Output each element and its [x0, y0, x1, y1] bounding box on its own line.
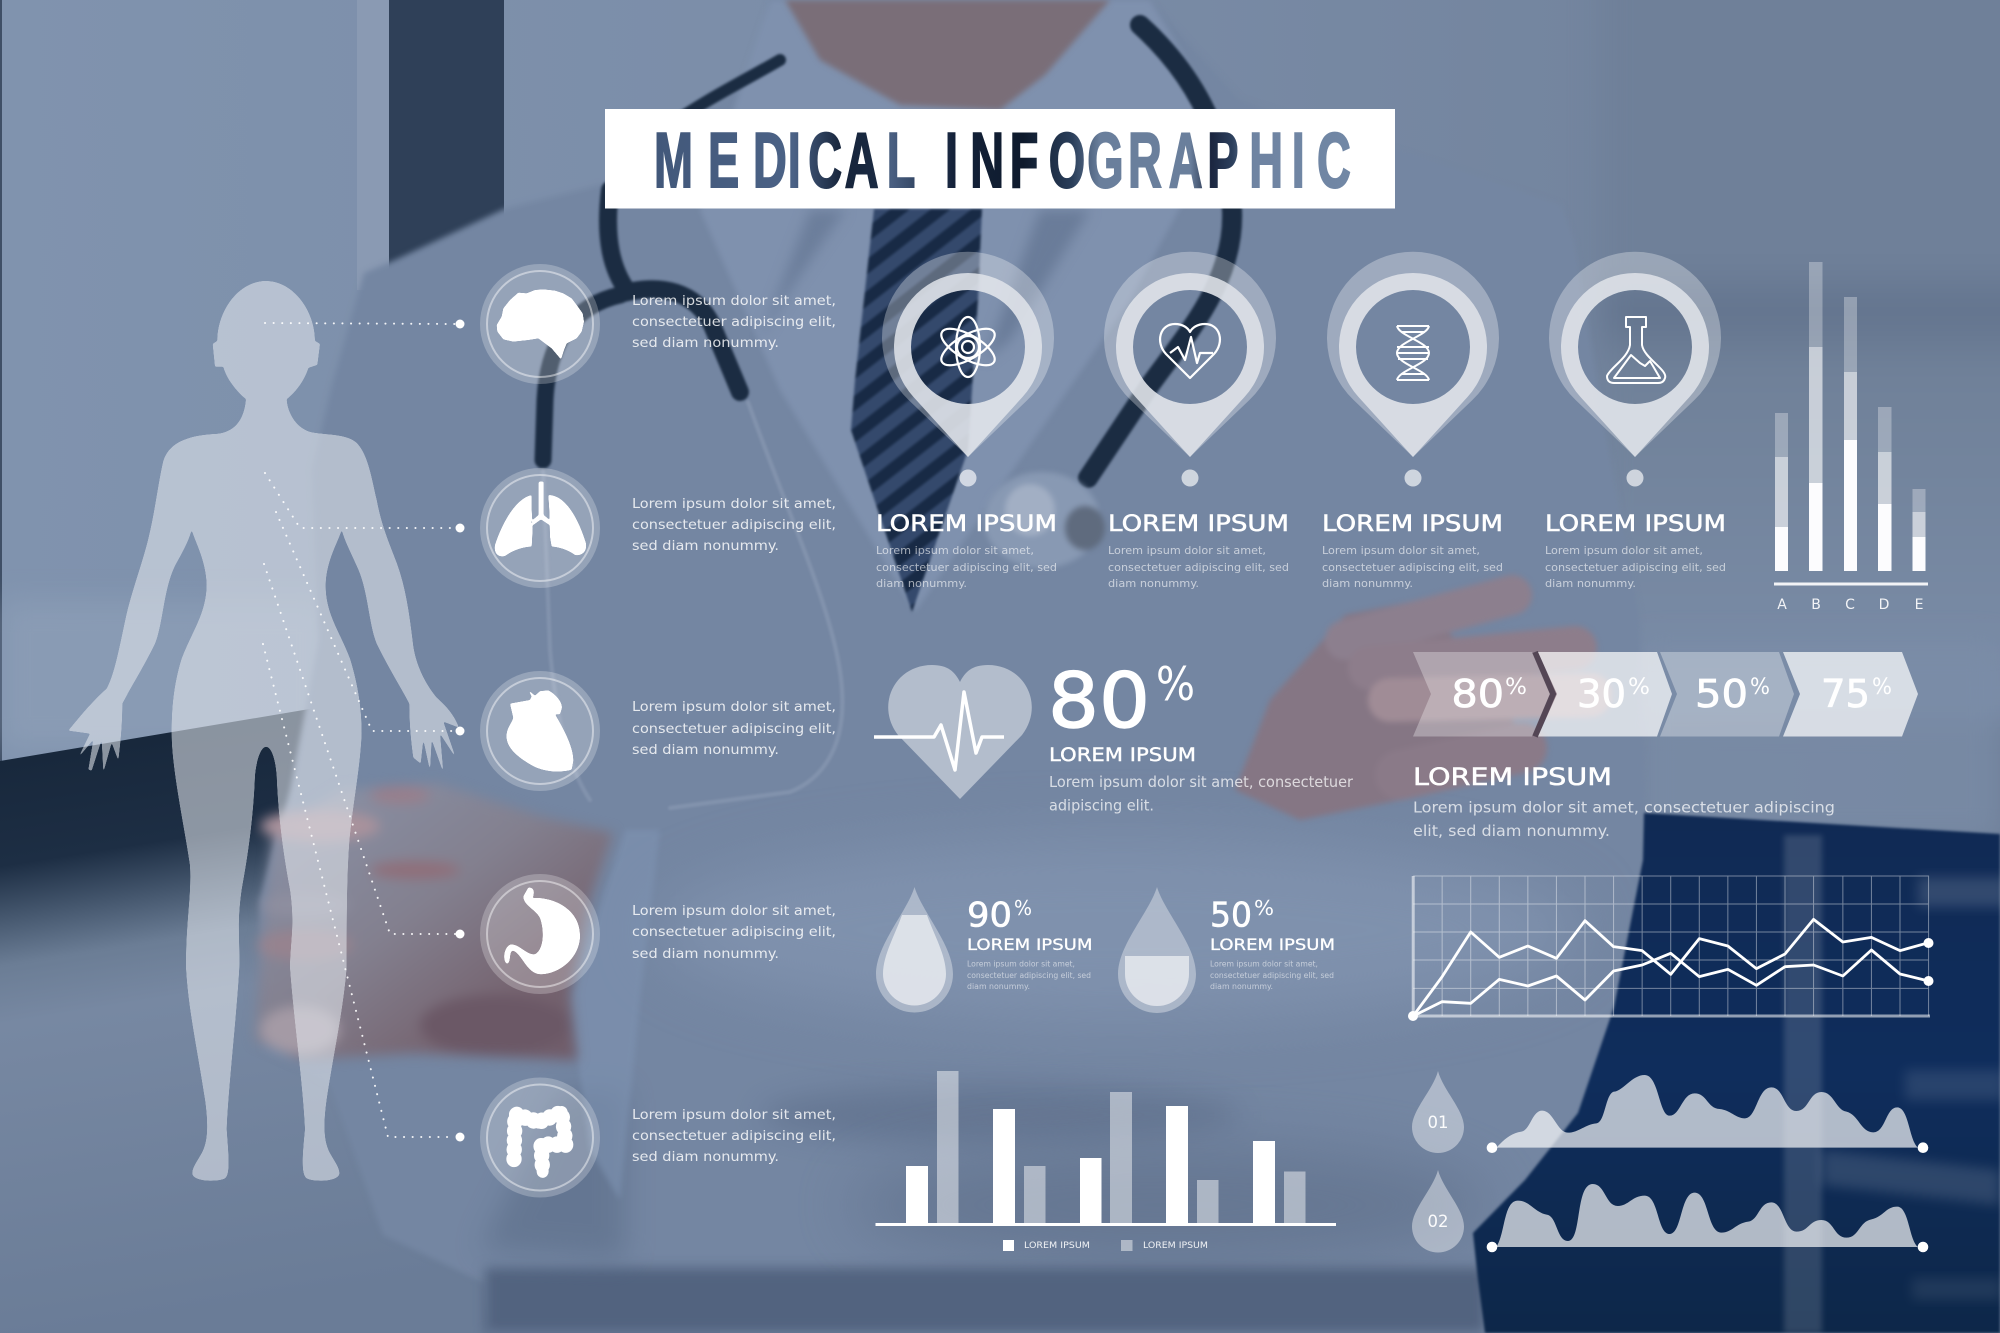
- stat 80 percent: %: [1156, 657, 1195, 711]
- stacked bar chart A-E: E: [1915, 597, 1923, 613]
- pin: atom: [882, 252, 1054, 486]
- line chart markers: [1408, 938, 1934, 1021]
- organ text: lungs: [632, 496, 836, 554]
- pin: flask: [1549, 252, 1721, 486]
- area chart end dots: [1487, 1142, 1928, 1252]
- dotted connectors: [263, 323, 455, 1137]
- drop stat 50 percent: LOREM IPSUM: [1210, 935, 1335, 954]
- organ text: stomach: consectetuer adipiscing elit,: [632, 924, 836, 940]
- chevron percent row: %: [1505, 675, 1527, 700]
- connector end dots: [456, 320, 464, 1142]
- chevron caption: [1413, 763, 1835, 840]
- pin text 2: diam nonummy.: [1108, 577, 1199, 590]
- organ text: brain: consectetuer adipiscing elit,: [632, 314, 836, 330]
- pin text 1: consectetuer adipiscing elit, sed: [876, 561, 1057, 574]
- chevron caption: LOREM IPSUM: [1413, 763, 1612, 791]
- organ text: lungs: sed diam nonummy.: [632, 538, 779, 554]
- chevron percent row: 30: [1577, 672, 1626, 716]
- organ badge: stomach: [480, 874, 600, 994]
- drop stat 50 percent: [1118, 887, 1335, 1013]
- pin text 4: LOREM IPSUM: [1545, 512, 1726, 537]
- human body silhouette: [68, 281, 459, 1181]
- line chart: [1413, 876, 1930, 1016]
- bar chart legend: LOREM IPSUM: [1143, 1241, 1208, 1251]
- stacked bar chart A-E: D: [1879, 597, 1889, 613]
- stacked bar chart A-E: B: [1811, 597, 1821, 613]
- organ text: stomach: Lorem ipsum dolor sit amet,: [632, 903, 836, 919]
- stat 80 percent: adipiscing elit.: [1049, 796, 1154, 814]
- pin text 3: Lorem ipsum dolor sit amet,: [1322, 544, 1480, 557]
- organ text: stomach: sed diam nonummy.: [632, 946, 779, 962]
- chevron percent row: 80: [1452, 672, 1504, 716]
- tie: [851, 209, 982, 612]
- organ text: brain: [632, 293, 836, 351]
- pin text 1: Lorem ipsum dolor sit amet,: [876, 544, 1034, 557]
- organ text: heart: Lorem ipsum dolor sit amet,: [632, 699, 836, 715]
- pin text 2: LOREM IPSUM: [1108, 512, 1289, 537]
- organ badge: lungs: [480, 468, 600, 588]
- drop stat 90 percent: %: [1014, 896, 1032, 920]
- left hand: [255, 783, 613, 1060]
- chevron percent row: %: [1628, 675, 1650, 700]
- pin text 4: diam nonummy.: [1545, 577, 1636, 590]
- stat 80 percent: Lorem ipsum dolor sit amet, consectetuer: [1049, 773, 1354, 791]
- pin text 2: [1108, 512, 1289, 590]
- organ text: brain: sed diam nonummy.: [632, 335, 779, 351]
- organ text: brain: Lorem ipsum dolor sit amet,: [632, 293, 836, 309]
- drop badge 02: [1412, 1170, 1464, 1253]
- drop stat 50 percent: 50: [1210, 896, 1252, 936]
- pin text 1: [876, 512, 1057, 590]
- organ text: intestine: consectetuer adipiscing elit,: [632, 1128, 836, 1144]
- pin text 4: [1545, 512, 1726, 590]
- pin: dna: [1327, 252, 1499, 486]
- bar chart legend: [1003, 1240, 1208, 1251]
- blue cabinet: [1473, 813, 2000, 1333]
- title: MEDICAL INFOGRAPHIC: [654, 117, 1351, 204]
- pin text 3: LOREM IPSUM: [1322, 512, 1503, 537]
- drop stat 50 percent: consectetuer adipiscing elit, sed: [1210, 971, 1334, 980]
- organ text: heart: [632, 699, 836, 758]
- stat 80 percent: LOREM IPSUM: [1049, 744, 1196, 766]
- drop stat 90 percent: LOREM IPSUM: [967, 935, 1092, 954]
- stat 80 percent: [1048, 656, 1354, 814]
- stethoscope tubes: [543, 25, 1232, 478]
- stacked bar chart A-E: A: [1777, 597, 1787, 613]
- chevron caption: elit, sed diam nonummy.: [1413, 822, 1610, 840]
- stacked bar chart A-E: C: [1845, 597, 1855, 613]
- pin text 2: consectetuer adipiscing elit, sed: [1108, 561, 1289, 574]
- organ text: intestine: [632, 1107, 836, 1165]
- organ text: intestine: Lorem ipsum dolor sit amet,: [632, 1107, 836, 1123]
- chevron percent row: 75: [1821, 672, 1870, 716]
- organ text: lungs: Lorem ipsum dolor sit amet,: [632, 496, 836, 512]
- bar chart legend: LOREM IPSUM: [1024, 1241, 1090, 1251]
- pin text 2: Lorem ipsum dolor sit amet,: [1108, 544, 1266, 557]
- stat 80 percent: 80: [1048, 656, 1150, 745]
- pin text 1: LOREM IPSUM: [876, 512, 1057, 537]
- stacked bar chart A-E: [1774, 262, 1928, 613]
- drop stat 50 percent: Lorem ipsum dolor sit amet,: [1210, 960, 1318, 968]
- organ badge: heart: [480, 671, 600, 791]
- grouped bar chart: [876, 1071, 1336, 1226]
- organ text: intestine: sed diam nonummy.: [632, 1149, 779, 1165]
- drop stat 50 percent: diam nonummy.: [1210, 982, 1273, 991]
- heart with pulse: [874, 665, 1032, 799]
- organ badge: brain: [480, 264, 600, 384]
- area chart 01: [1496, 1075, 1918, 1148]
- pin text 3: diam nonummy.: [1322, 577, 1413, 590]
- organ text: heart: consectetuer adipiscing elit,: [632, 721, 836, 737]
- pin text 3: consectetuer adipiscing elit, sed: [1322, 561, 1503, 574]
- coat base: [260, 0, 1644, 1333]
- chevron percent row: 50: [1695, 672, 1748, 716]
- drop stat 90 percent: consectetuer adipiscing elit, sed: [967, 971, 1091, 980]
- pin text 3: [1322, 512, 1503, 590]
- drop stat 90 percent: 90: [967, 896, 1012, 936]
- chevron percent row: %: [1750, 675, 1770, 700]
- pin text 4: consectetuer adipiscing elit, sed: [1545, 561, 1726, 574]
- organ text: lungs: consectetuer adipiscing elit,: [632, 517, 836, 533]
- pin text 4: Lorem ipsum dolor sit amet,: [1545, 544, 1703, 557]
- drop stat 90 percent: [876, 887, 1092, 1012]
- chest piece: [984, 472, 1105, 568]
- drop badge 01: [1412, 1071, 1464, 1153]
- organ text: heart: sed diam nonummy.: [632, 742, 779, 758]
- drop badge 01: 01: [1428, 1113, 1448, 1132]
- drop stat 90 percent: diam nonummy.: [967, 982, 1030, 991]
- drop stat 90 percent: Lorem ipsum dolor sit amet,: [967, 960, 1075, 968]
- drop badge 02: 02: [1428, 1212, 1448, 1231]
- neck skin: [785, 0, 1110, 110]
- organ badge: intestine: [480, 1078, 600, 1198]
- cuff: [570, 830, 660, 1200]
- chevron caption: Lorem ipsum dolor sit amet, consectetuer adipiscing: [1413, 798, 1835, 816]
- shirt and collar: [700, 0, 1225, 612]
- area chart 02: [1496, 1184, 1918, 1247]
- pin: heart pulse: [1104, 252, 1276, 486]
- drop stat 50 percent: %: [1254, 896, 1274, 920]
- chevron percent row: %: [1872, 675, 1892, 700]
- chevron percent row: [1413, 652, 1918, 736]
- right hand: [1235, 595, 1590, 820]
- organ text: stomach: [632, 903, 836, 962]
- pin text 1: diam nonummy.: [876, 577, 967, 590]
